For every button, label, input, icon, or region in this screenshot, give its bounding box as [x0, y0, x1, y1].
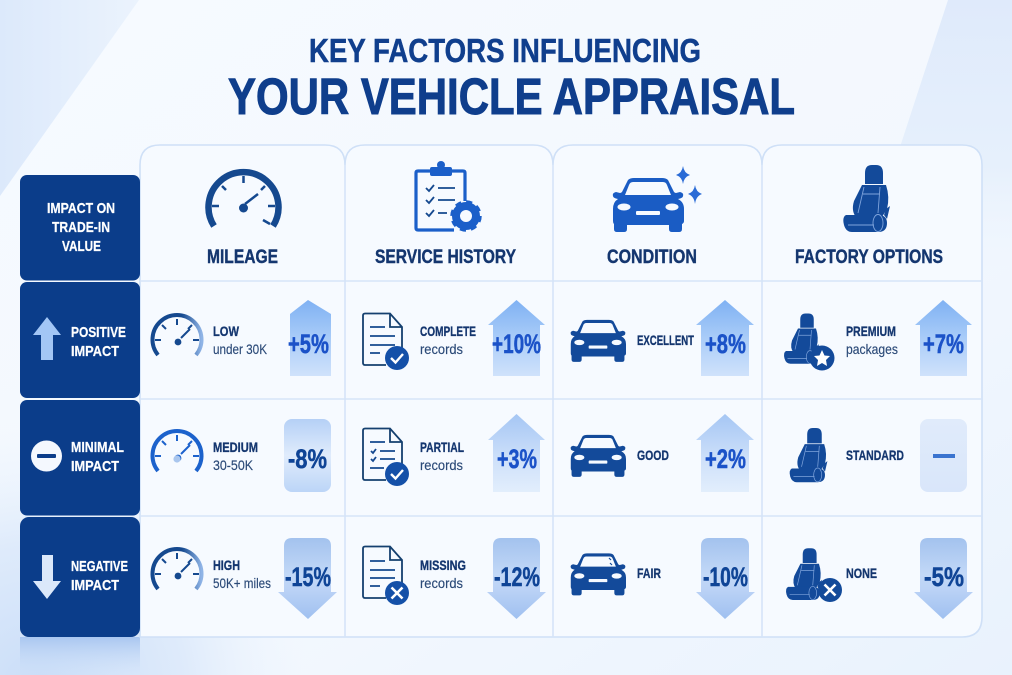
column header: factory options — [795, 165, 943, 268]
cell: condition excellent — [571, 300, 754, 376]
cell: condition excellent: EXCELLENT — [637, 332, 694, 348]
cell: options premium — [784, 300, 972, 376]
row header: positive impact: IMPACT — [71, 343, 119, 360]
cell: service complete: +10% — [492, 329, 541, 359]
cell: options none — [786, 538, 973, 619]
cell: options premium: packages — [846, 341, 898, 357]
cell: mileage medium: -8% — [288, 444, 327, 474]
cell: service partial: PARTIAL — [420, 439, 464, 455]
cell: service partial: +3% — [497, 444, 537, 474]
row header: negative impact — [20, 517, 140, 637]
cell: options standard — [790, 419, 967, 492]
row header: impact on trade-in value — [20, 175, 140, 280]
column header: service history — [375, 161, 516, 268]
cell: mileage low — [152, 300, 331, 376]
column header: condition — [607, 166, 702, 268]
cell: mileage high: -15% — [285, 562, 331, 592]
cell: service complete — [363, 300, 545, 376]
column header: mileage: MILEAGE — [207, 246, 278, 268]
panel: row headers — [20, 175, 140, 637]
cell: service missing: records — [420, 575, 463, 591]
cell: mileage low: +5% — [288, 329, 329, 359]
cell: mileage medium — [152, 419, 331, 492]
comparison table grid — [140, 145, 982, 637]
cell: condition excellent: +8% — [705, 329, 746, 359]
cell: mileage low: LOW — [213, 323, 240, 339]
cell: mileage medium: MEDIUM — [213, 439, 258, 455]
title — [228, 32, 795, 125]
cell: service partial: records — [420, 457, 463, 473]
cell: service missing: -12% — [494, 562, 540, 592]
cell: mileage high: 50K+ miles — [213, 575, 271, 591]
cell: condition fair: FAIR — [637, 565, 661, 581]
cell: mileage low: under 30K — [213, 341, 268, 357]
cell: condition fair — [571, 538, 755, 619]
row header: minimal impact: MINIMAL — [71, 439, 124, 456]
title: YOUR VEHICLE APPRAISAL — [228, 68, 795, 125]
cell: options premium: PREMIUM — [846, 323, 896, 339]
row header: minimal impact: IMPACT — [71, 458, 119, 475]
row header: impact on trade-in value: TRADE-IN — [52, 219, 110, 236]
column header: service history: SERVICE HISTORY — [375, 246, 516, 268]
cell: service missing — [363, 538, 546, 619]
row header: negative impact: NEGATIVE — [71, 558, 128, 575]
cell: condition fair: -10% — [703, 562, 748, 592]
cell: condition good — [571, 414, 754, 492]
column header: mileage — [207, 172, 278, 268]
cell: condition good: +2% — [705, 444, 746, 474]
cell: options premium: +7% — [923, 329, 964, 359]
column header: factory options: FACTORY OPTIONS — [795, 246, 943, 268]
cell: service complete: COMPLETE — [420, 323, 476, 339]
column header: condition: CONDITION — [607, 246, 697, 268]
cell: condition good: GOOD — [637, 447, 669, 463]
cell: service complete: records — [420, 341, 463, 357]
row header: positive impact: POSITIVE — [71, 324, 126, 341]
row header: impact on trade-in value: VALUE — [62, 238, 101, 255]
cell: mileage high: HIGH — [213, 557, 240, 573]
cell: options none: NONE — [846, 565, 877, 581]
cell: options none: -5% — [924, 562, 964, 592]
cell: service missing: MISSING — [420, 557, 466, 573]
row header: minimal impact — [20, 400, 140, 516]
cell: mileage high — [152, 538, 337, 619]
row header: positive impact — [20, 282, 140, 398]
row header: impact on trade-in value: IMPACT ON — [47, 200, 115, 217]
cell: service partial — [363, 414, 545, 492]
cell: options standard: STANDARD — [846, 447, 904, 463]
row header: negative impact: IMPACT — [71, 577, 119, 594]
title: KEY FACTORS INFLUENCING — [309, 32, 701, 69]
cell: mileage medium: 30-50K — [213, 457, 254, 473]
